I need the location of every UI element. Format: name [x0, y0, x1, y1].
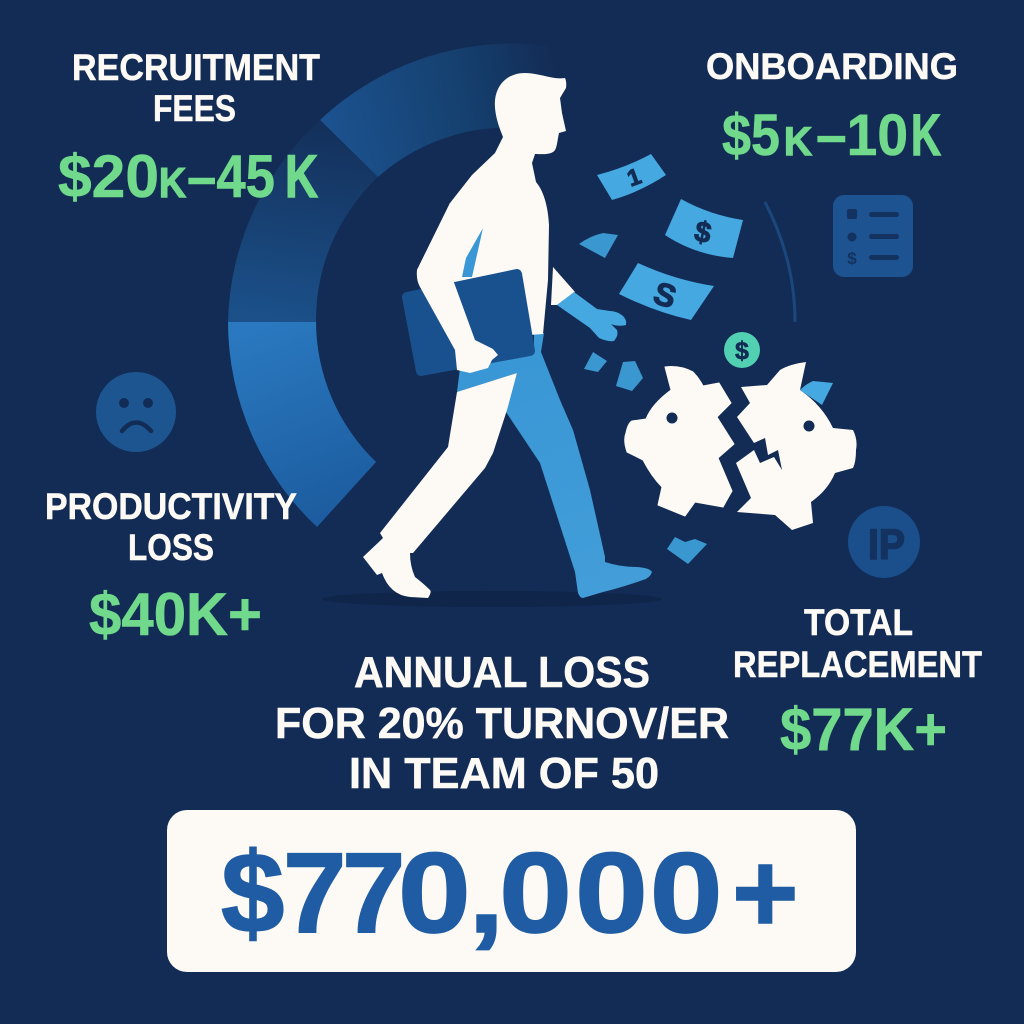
- piggy: left half: [625, 367, 734, 516]
- coin: [724, 332, 760, 368]
- value: recruitment fees: [58, 143, 318, 210]
- heading: annual loss: IN TEAM OF 50: [349, 749, 659, 798]
- piggy: left eye: [666, 412, 678, 424]
- piggy: right eye: [804, 420, 814, 432]
- label: recruitment fees: RECRUITMENT: [72, 47, 320, 88]
- bill: large dollar: S: [649, 275, 681, 315]
- flying money: [579, 154, 743, 564]
- heading: annual loss: [275, 648, 729, 798]
- total value: [221, 830, 799, 957]
- icon: IP badge: [848, 506, 920, 578]
- piggy: ear: [800, 381, 833, 405]
- total callout: [167, 810, 856, 972]
- value: onboarding: $5: [722, 103, 780, 168]
- shard: [616, 361, 643, 391]
- label: productivity loss: LOSS: [128, 527, 214, 568]
- ground shadow: [322, 591, 662, 607]
- shard: [667, 537, 707, 564]
- shard: [579, 233, 618, 258]
- label: total replacement: REPLACEMENT: [733, 644, 982, 685]
- value: recruitment fees: K: [285, 143, 318, 210]
- broken piggy bank: [625, 362, 857, 530]
- shirt gap: [462, 228, 483, 277]
- value: recruitment fees: $20: [58, 143, 159, 210]
- total value: +: [732, 830, 799, 957]
- bill: one: [597, 154, 666, 200]
- bill: one: 1: [624, 163, 645, 191]
- chart: cost ring behind figure: [228, 44, 560, 527]
- icon: IP badge: IP: [868, 521, 905, 569]
- torso and head: [417, 73, 566, 360]
- label: onboarding: ONBOARDING: [706, 46, 958, 87]
- label: recruitment fees: FEES: [153, 88, 236, 129]
- ring segment: middle: [228, 120, 378, 322]
- value: productivity loss: $40K+: [89, 581, 262, 648]
- label: productivity loss: [45, 486, 297, 568]
- value: recruitment fees: –45: [187, 143, 275, 210]
- bill: dollar: [665, 199, 743, 258]
- label: recruitment fees: [72, 47, 320, 129]
- laptop: [407, 274, 530, 371]
- label: total replacement: [733, 602, 982, 685]
- ring segment: bottom: [228, 322, 376, 527]
- icon: checklist: $: [847, 249, 857, 268]
- heading: annual loss: ANNUAL LOSS: [354, 648, 650, 697]
- bill: large dollar: [619, 263, 714, 320]
- thin arc accent: [765, 202, 795, 322]
- back leg: [457, 333, 652, 598]
- value: onboarding: K: [911, 103, 941, 168]
- total value: $77: [221, 830, 405, 957]
- value: onboarding: –10: [816, 103, 908, 168]
- shard: [584, 352, 607, 372]
- bill: dollar: $: [692, 216, 714, 250]
- forward hand: [557, 292, 626, 341]
- forward arm sleeve: [551, 267, 575, 305]
- coin: $: [735, 337, 749, 365]
- icon: checklist: [833, 195, 913, 277]
- label: productivity loss: PRODUCTIVITY: [45, 486, 297, 527]
- figure: walking man: [363, 73, 652, 598]
- label: total replacement: TOTAL: [804, 602, 913, 643]
- value: recruitment fees: K: [159, 159, 186, 206]
- heading: annual loss: FOR 20% TURNOV/ER: [275, 699, 729, 748]
- piggy: right half: [736, 362, 857, 530]
- value: onboarding: [722, 103, 941, 168]
- value: onboarding: K: [784, 120, 812, 164]
- front leg: [363, 373, 517, 598]
- value: total replacement: $77K+: [780, 696, 947, 763]
- total value: 0,000: [398, 830, 723, 957]
- ring segment: top: [320, 44, 560, 177]
- icon: sad face: [96, 372, 176, 452]
- arm holding laptop: [417, 203, 498, 373]
